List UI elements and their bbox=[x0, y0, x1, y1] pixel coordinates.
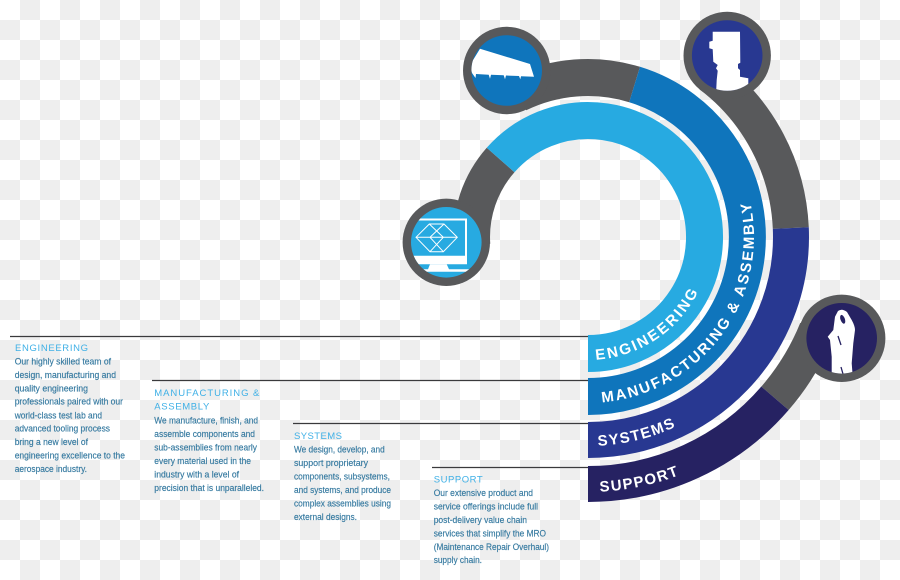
text block: engineering bbox=[14, 343, 125, 474]
ring label: manufacturing and assembly: MANUFACTURING & ASSEMBLY bbox=[602, 204, 754, 402]
body: engineering: world-class test lab and bbox=[14, 409, 102, 420]
body: engineering: bring a new level of bbox=[15, 436, 88, 447]
gray stem: support bbox=[775, 330, 817, 398]
body: support: service offerings include full bbox=[434, 501, 538, 512]
body: engineering: design, manufacturing and bbox=[15, 369, 116, 380]
body: manufacturing and assembly bbox=[154, 414, 264, 493]
connector lines bbox=[10, 336, 589, 468]
gray stem: systems bbox=[710, 75, 791, 228]
body: support: post-delivery value chain bbox=[434, 514, 527, 525]
body: systems: components, subsystems, bbox=[294, 471, 390, 482]
body: support: services that simplify the MRO bbox=[434, 528, 546, 539]
arc chart: concentric capability rings bbox=[458, 59, 816, 502]
gray stem: manufacturing bbox=[518, 78, 635, 94]
body: systems: and systems, and produce bbox=[294, 484, 391, 495]
body: manufacturing and assembly: every material used in the bbox=[154, 455, 251, 466]
body: engineering: quality engineering bbox=[15, 382, 88, 393]
body: support: supply chain. bbox=[434, 554, 482, 565]
icon: mechanical assembly bbox=[684, 12, 771, 99]
ring: engineering bbox=[501, 120, 705, 354]
body: manufacturing and assembly: We manufacture, finish, and bbox=[154, 414, 258, 425]
body: support: (Maintenance Repair Overhaul) bbox=[434, 541, 549, 552]
body: support: Our extensive product and bbox=[434, 487, 533, 498]
body: engineering: advanced tooling process bbox=[15, 423, 110, 434]
body: engineering bbox=[14, 356, 125, 474]
ring: manufacturing and assembly bbox=[588, 84, 747, 396]
body: manufacturing and assembly: assemble components and bbox=[154, 428, 255, 439]
text block: systems bbox=[294, 431, 391, 522]
ring label: systems: SYSTEMS bbox=[598, 418, 674, 446]
heading: manufacturing and assembly bbox=[154, 388, 260, 413]
heading: support: SUPPORT bbox=[434, 475, 483, 486]
body: systems: support proprietary bbox=[294, 457, 368, 468]
ring: systems bbox=[588, 228, 791, 440]
body: systems: complex assemblies using bbox=[294, 498, 391, 509]
icon: wing component bbox=[463, 27, 550, 114]
body: engineering: aerospace industry. bbox=[15, 463, 87, 474]
body: engineering: professionals paired with our bbox=[15, 396, 123, 407]
heading: manufacturing and assembly: MANUFACTURING & bbox=[154, 388, 260, 399]
icon: support part bbox=[798, 295, 885, 382]
body: manufacturing and assembly: sub-assemblies from nearly bbox=[154, 441, 257, 452]
gray stem: engineering bbox=[472, 160, 501, 245]
ring label: engineering: ENGINEERING bbox=[596, 289, 696, 360]
text block: manufacturing and assembly bbox=[154, 388, 264, 493]
body: systems: external designs. bbox=[294, 511, 357, 522]
body: engineering: Our highly skilled team of bbox=[15, 356, 111, 366]
body: systems bbox=[294, 443, 391, 522]
body: manufacturing and assembly: industry with a level of bbox=[154, 468, 239, 479]
ring label: support: SUPPORT bbox=[600, 466, 676, 492]
heading: engineering: ENGINEERING bbox=[15, 343, 88, 354]
body: systems: We design, develop, and bbox=[294, 443, 385, 454]
body: support bbox=[434, 487, 549, 565]
ring: support bbox=[588, 398, 775, 484]
heading: systems: SYSTEMS bbox=[294, 431, 342, 442]
text block: support bbox=[434, 475, 549, 565]
body: engineering: engineering excellence to the bbox=[15, 450, 125, 461]
icon: monitor bbox=[403, 199, 490, 286]
body: manufacturing and assembly: precision that is unparalleled. bbox=[154, 482, 264, 493]
heading: manufacturing and assembly: ASSEMBLY bbox=[154, 402, 210, 413]
